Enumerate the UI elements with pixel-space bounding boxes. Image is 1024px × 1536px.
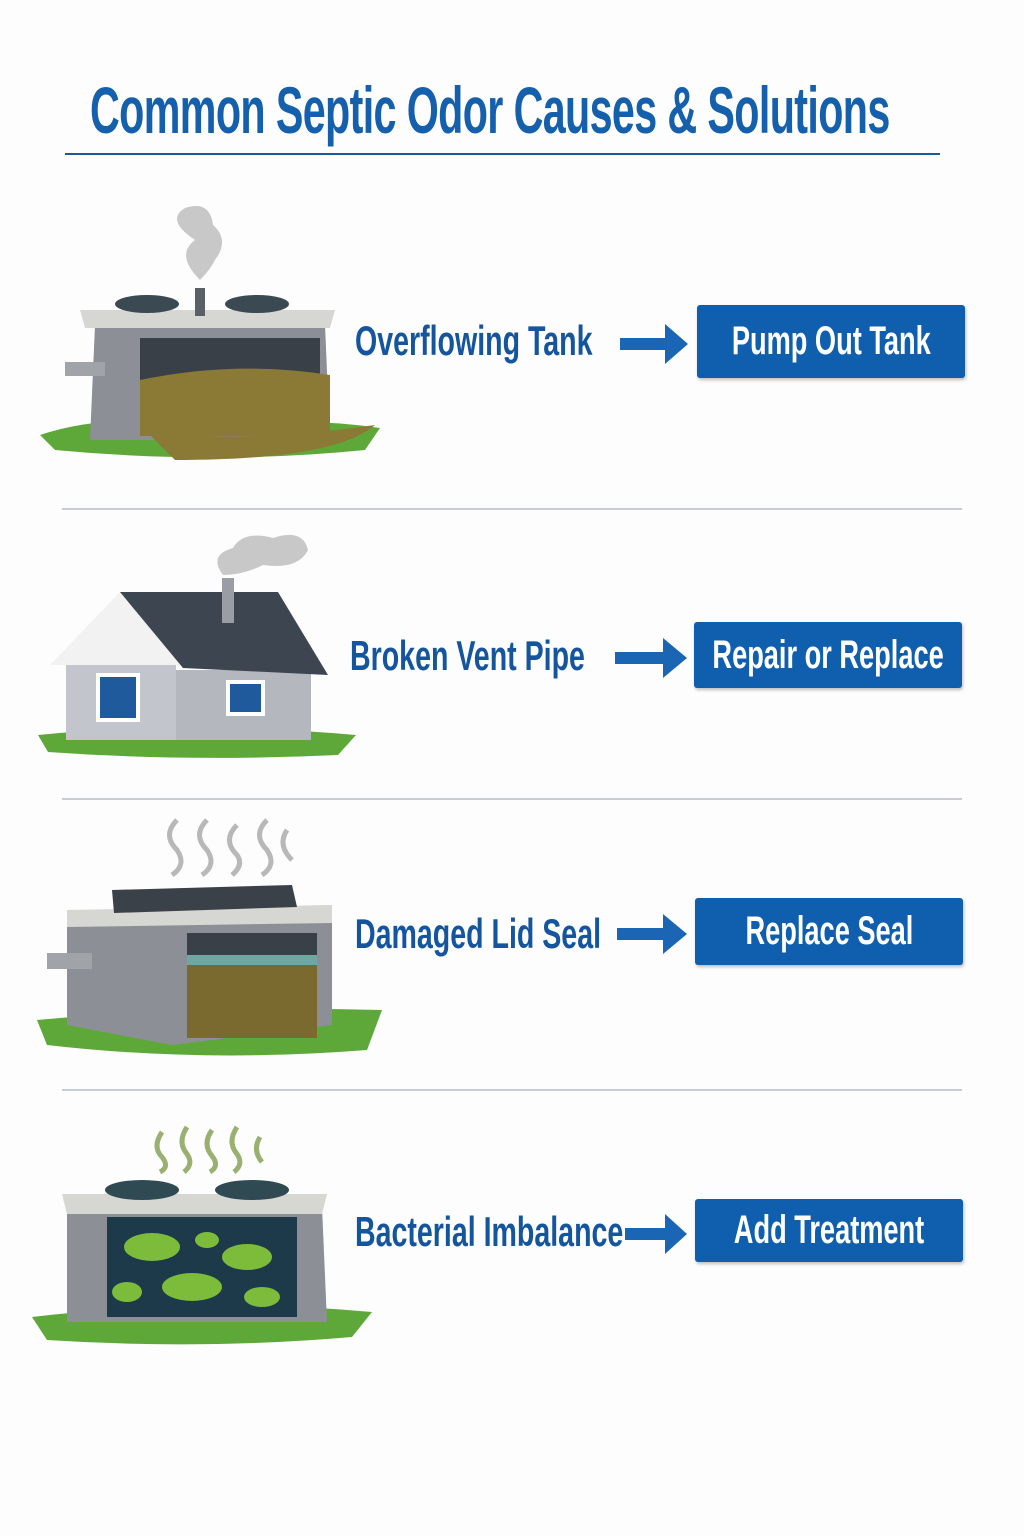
title: Common Septic Odor Causes & Solutions — [90, 73, 890, 147]
label: broken vent pipe: Broken Vent Pipe — [350, 632, 585, 679]
button: pump out tank: Pump Out Tank — [732, 319, 930, 363]
arrow 4 — [625, 1214, 687, 1254]
arrow 3 — [617, 914, 687, 954]
label: overflowing tank: Overflowing Tank — [355, 317, 593, 364]
label: bacterial imbalance: Bacterial Imbalance — [355, 1208, 623, 1255]
arrow 1 — [620, 324, 688, 364]
icon: house with vent — [38, 534, 356, 758]
button: repair or replace: Repair or Replace — [712, 632, 944, 676]
button: replace seal — [695, 898, 963, 965]
button: pump out tank — [697, 305, 965, 378]
arrow 2 — [615, 638, 687, 678]
button: repair or replace — [694, 622, 962, 688]
icon: overflowing tank — [40, 206, 380, 460]
label: damaged lid seal: Damaged Lid Seal — [355, 910, 601, 957]
button: replace seal: Replace Seal — [745, 909, 913, 953]
button: add treatment: Add Treatment — [734, 1208, 924, 1252]
icon: bacterial tank — [32, 1126, 372, 1344]
button: add treatment — [695, 1199, 963, 1262]
icon: damaged lid tank — [37, 818, 382, 1056]
